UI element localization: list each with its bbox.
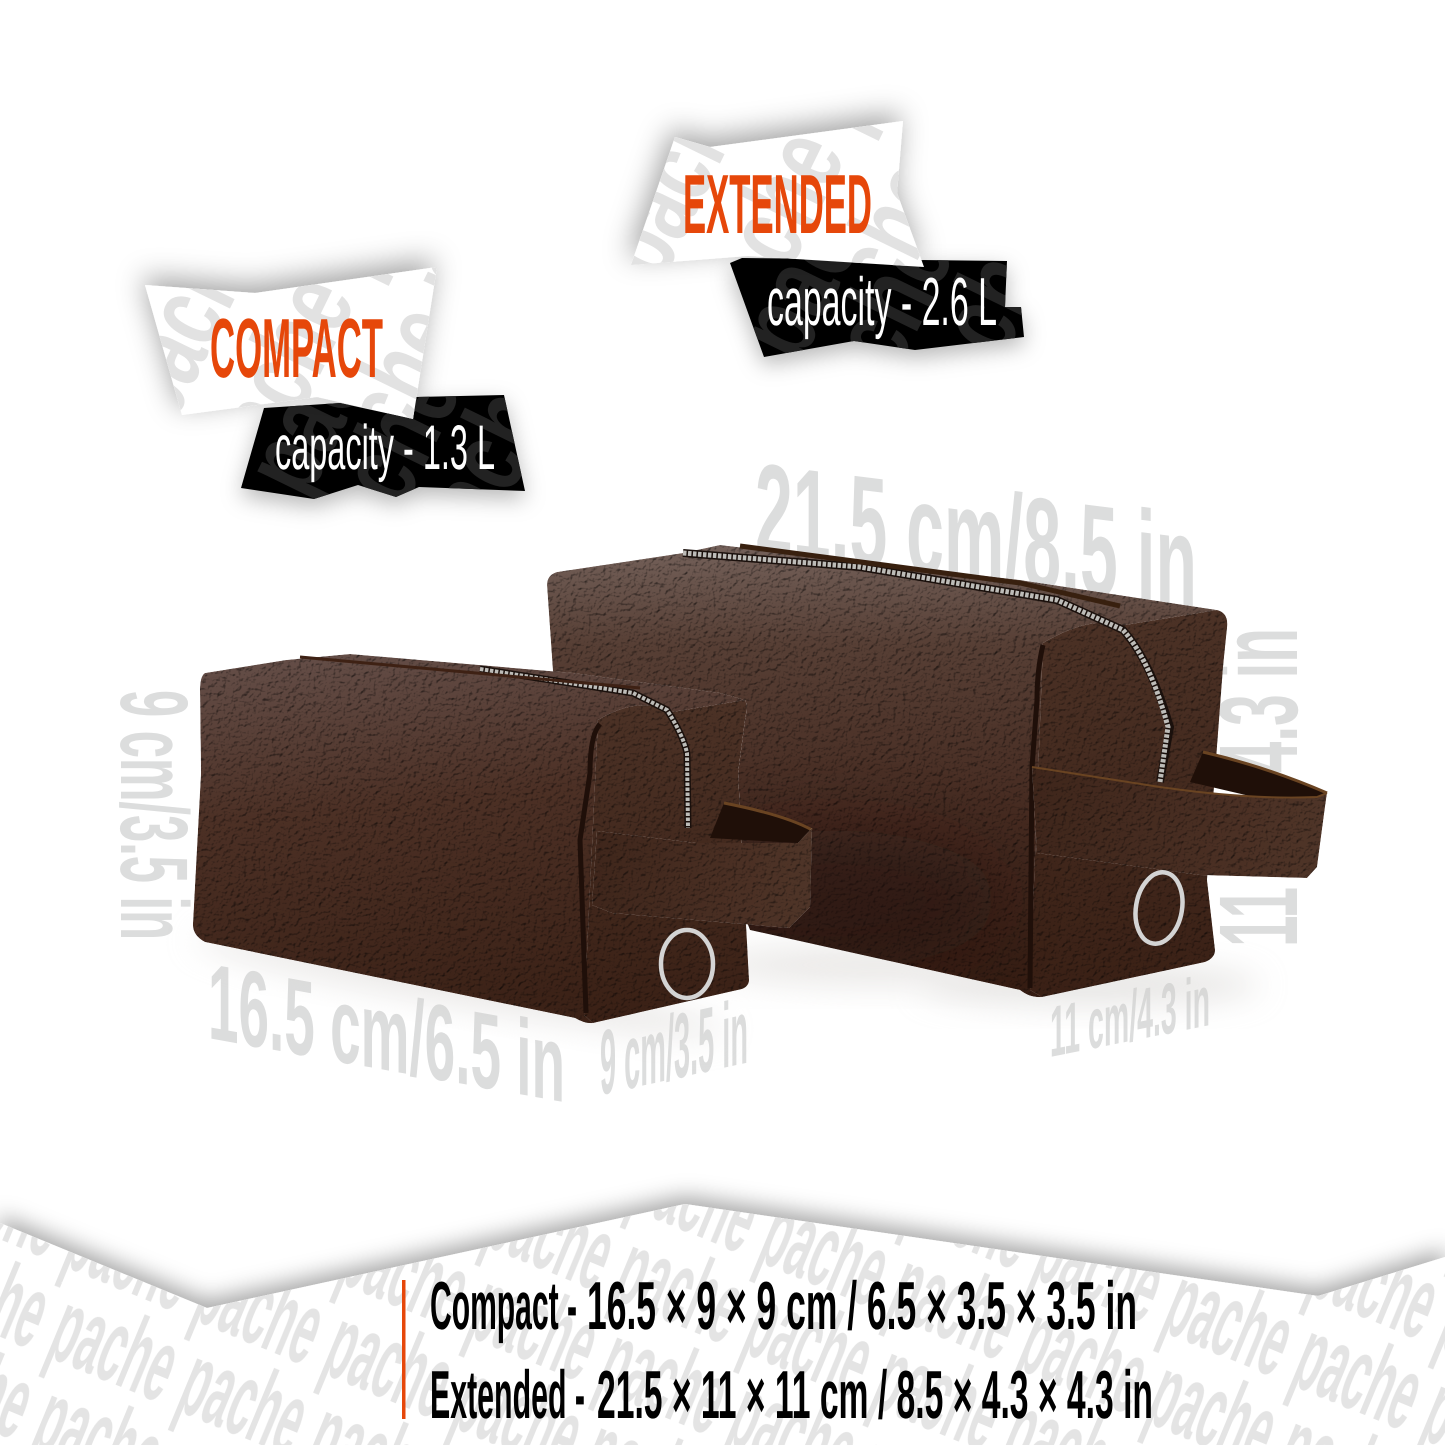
badge: extended title: EXTENDED [683, 157, 872, 251]
compact bag key ring [661, 930, 713, 998]
badge: extended capacity [722, 256, 1034, 374]
compact capacity text: capacity - 1.3 L [275, 413, 495, 483]
extended bag side panel [1030, 610, 1227, 997]
dimensions text block [430, 1268, 1153, 1433]
extended bag key ring [1130, 869, 1188, 947]
extended leather bag [547, 545, 1327, 997]
badge: compact title: COMPACT [210, 301, 383, 395]
compact dimensions [430, 1268, 1137, 1344]
extended bag shading [742, 826, 984, 974]
badge: compact capacity: pache [218, 252, 430, 512]
badge: compact title: pache pa [171, 157, 427, 508]
badge: compact title: pache pa [279, 187, 534, 538]
badge: extended title [617, 98, 932, 272]
compact leather bag [193, 654, 812, 1023]
badge: extended capacity: pache [711, 116, 922, 377]
bottom patterned band [0, 1204, 1445, 1445]
badge: compact capacity [233, 391, 534, 518]
compact bag handle strap [592, 828, 812, 928]
dimension label: extended height: 11 cm/4.3 in [1196, 628, 1321, 947]
compact bag body [193, 654, 749, 1023]
badge: extended capacity: pache [766, 209, 977, 470]
text: 11 cm/4.3 in [1050, 961, 1210, 1073]
extended dimensions [430, 1357, 1153, 1433]
extended bag zipper [683, 546, 1170, 782]
compact bag side panel [584, 700, 749, 1023]
badge: compact capacity: pache [380, 330, 591, 591]
compact dimensions: Compact - [430, 1268, 577, 1344]
orange divider line [402, 1280, 406, 1419]
dimension label: compact height: 9 cm/3.5 in [100, 690, 207, 940]
badge: compact title [130, 244, 448, 422]
floor shadows [191, 918, 1260, 1052]
compact bag corner seam [580, 724, 600, 1013]
extended dimensions: Extended - [430, 1357, 585, 1433]
extended bag handle strap [1032, 767, 1327, 878]
text: 9 cm/3.5 in [600, 980, 748, 1115]
compact bag back handle loop [710, 803, 812, 843]
extended bag back handle loop [1190, 752, 1327, 800]
badge: extended capacity: capacity - 2.6 L [767, 264, 997, 340]
compact bag zipper [300, 657, 688, 828]
extended bag body [547, 545, 1227, 997]
extended bag corner seam [1030, 645, 1043, 988]
badge: compact capacity: pache [273, 345, 484, 606]
dimension label: compact length: 16.5 cm/6.5 in [208, 940, 565, 1125]
badge: extended capacity: pache [873, 195, 1084, 456]
